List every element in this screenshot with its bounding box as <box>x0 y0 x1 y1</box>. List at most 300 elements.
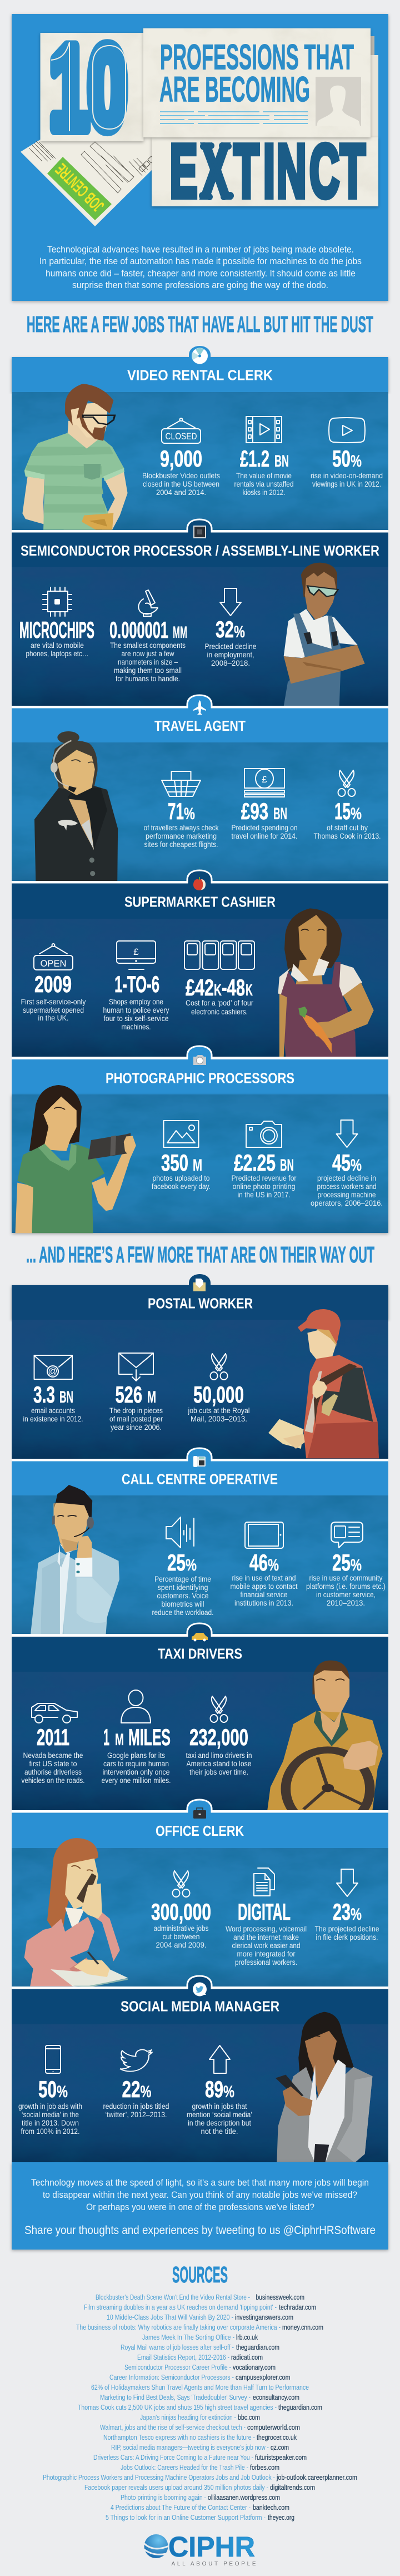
icon: smartphone <box>46 2045 61 2073</box>
description: authorise driverless <box>24 1768 82 1776</box>
description: institutions in 2013. <box>234 1599 293 1607</box>
number: 23 <box>333 1899 351 1925</box>
description: spent identifying <box>158 1583 208 1592</box>
panel: video rental clerk <box>12 346 388 530</box>
stat: 32% <box>204 588 257 667</box>
number: MILES <box>128 1724 171 1750</box>
figure: assembly worker <box>284 563 365 706</box>
description: for humans to handle. <box>116 675 180 683</box>
description: administrative jobs <box>153 1924 209 1933</box>
divider arch <box>12 1623 388 1637</box>
stat: 2011 <box>21 1703 84 1785</box>
closing paragraph: Or perhaps you were in one of the professions we've listed? <box>86 2202 314 2212</box>
icon: film reel badge <box>192 348 208 364</box>
icon: four pods <box>184 941 254 969</box>
description: job cuts at the Royal <box>188 1406 250 1415</box>
divider arch <box>12 1976 388 1989</box>
description: mention ‘social media’ <box>187 2111 252 2119</box>
big number 10: 10 <box>49 22 127 154</box>
number: 2009 <box>34 971 72 997</box>
heading: PHOTOGRAPHIC PROCESSORS <box>106 1071 294 1087</box>
description: and the internet make <box>233 1933 299 1941</box>
heading: TRAVEL AGENT <box>154 719 246 734</box>
panel: hero header <box>12 14 388 301</box>
description: performance marketing <box>146 832 217 840</box>
description: 2010–2013. <box>327 1599 365 1607</box>
closing paragraph: to disappear within the next year. Can you think of any notable jobs we've missed? <box>43 2189 357 2200</box>
icon: scissors <box>210 1696 228 1722</box>
icon: car <box>32 1703 77 1723</box>
icon: mail drop <box>119 1353 153 1381</box>
sources list: forbes.com <box>250 2463 279 2471</box>
intro text: Technological advances have resulted in a number of jobs being made obsolete. <box>47 244 354 255</box>
description: rise in use of text and <box>232 1574 296 1582</box>
number: 1-TO-6 <box>114 971 159 997</box>
stat: 3.3 BN <box>23 1355 83 1423</box>
description: America stand to lose <box>187 1760 251 1768</box>
number: M <box>115 1731 124 1749</box>
sources list: lrb.co.uk <box>236 2333 258 2341</box>
description: customers. Voice <box>157 1592 209 1600</box>
description: processing machine <box>318 1191 376 1199</box>
number: -48 <box>222 974 245 1000</box>
number: £2.25 <box>234 1150 276 1176</box>
number: MM <box>173 623 187 642</box>
heading: SUPERMARKET CASHIER <box>124 894 276 910</box>
description <box>186 1751 252 1776</box>
description: of mail posted per <box>109 1415 163 1423</box>
description: Cost for a ‘pod’ of four <box>186 999 253 1007</box>
figure: postal worker <box>268 1309 379 1458</box>
sources list: bbc.com <box>238 2413 260 2421</box>
main title paper <box>143 28 371 137</box>
icon: email at: @ <box>48 1366 58 1376</box>
number: % <box>351 1556 362 1574</box>
number: BN <box>274 452 289 470</box>
closing paragraph: Technology moves at the speed of light, so it's a sure bet that many more jobs will begin <box>31 2177 369 2188</box>
figure: cashier <box>278 908 374 1057</box>
description: ‘social media’ in the <box>22 2111 79 2119</box>
description: Predicted decline <box>204 642 257 651</box>
sources list: theguardian.com <box>278 2403 322 2411</box>
sources list: Royal Mail warns of job losses after sell-off - <box>121 2343 234 2351</box>
description: four to six self-service <box>103 1014 169 1023</box>
sources list: Facebook paper reveals users upload around 350 million photos daily - <box>84 2483 268 2491</box>
icon: briefcase badge <box>193 1808 206 1819</box>
description: Predicted spending on <box>231 824 298 832</box>
icon: basket <box>162 771 201 796</box>
number: BN <box>273 805 287 823</box>
icon: play screen <box>329 418 365 443</box>
heading: CALL CENTRE OPERATIVE <box>122 1472 278 1487</box>
description: reduce the workload. <box>152 1608 213 1617</box>
stat: 71% <box>143 771 219 849</box>
description: not the title. <box>201 2127 238 2136</box>
number: MICROCHIPS <box>19 617 94 643</box>
description: process workers and <box>317 1182 377 1191</box>
panel: call centre operative <box>12 1448 388 1634</box>
description <box>311 1174 383 1207</box>
number: % <box>268 1556 279 1574</box>
divider arch <box>12 1046 388 1059</box>
number: % <box>184 805 195 823</box>
description: email accounts <box>31 1406 75 1415</box>
figure: social media manager <box>276 2012 372 2163</box>
number: 526 <box>116 1381 142 1408</box>
description <box>21 1751 84 1785</box>
panel: semiconductor processor <box>12 519 388 706</box>
description: facebook every day. <box>152 1182 211 1191</box>
description: from 100% in 2012. <box>21 2127 80 2136</box>
description <box>231 1174 297 1199</box>
description: platforms (i.e. forums etc.) <box>306 1582 386 1591</box>
description <box>143 824 219 849</box>
description: online photo printing <box>232 1182 296 1191</box>
description <box>21 998 86 1022</box>
icon: scissors <box>172 1871 190 1897</box>
divider arch <box>12 1448 388 1462</box>
sources list: futuristspeaker.com <box>255 2453 307 2461</box>
number: % <box>223 2083 234 2101</box>
icon: bone ends on X <box>199 142 234 200</box>
icon: monitor <box>117 941 156 969</box>
number: 3.3 <box>33 1381 55 1408</box>
description: rise in use of community <box>309 1574 383 1582</box>
sources list: Blockbuster's Death Scene Won't End the Video Rental Store - <box>96 2293 250 2301</box>
number: % <box>234 623 245 641</box>
icon: closed sign: CLOSED <box>166 431 197 442</box>
icon: striped globe <box>143 2534 169 2558</box>
panel: taxi drivers <box>12 1623 388 1828</box>
description: supermarket opened <box>23 1006 84 1014</box>
description <box>231 824 298 840</box>
divider arch <box>12 519 388 533</box>
sources list: Jobs Outlook: Careers Headed for the Trash Pile - <box>121 2463 248 2471</box>
icon: phone badge <box>193 1456 206 1467</box>
sources list: econsultancy.com <box>253 2393 299 2401</box>
stat: 25% time <box>152 1517 213 1617</box>
description <box>18 2102 82 2136</box>
description <box>230 1574 298 1607</box>
description: operators, 2006–2016. <box>311 1199 383 1207</box>
description: phones, laptops etc… <box>26 650 89 658</box>
paper: number 10 <box>40 22 143 154</box>
panel: office clerk <box>12 1800 388 1987</box>
job centre paper: JOB CENTRE <box>52 160 108 216</box>
description: First self-service-only <box>21 998 86 1006</box>
icon: down arrow <box>337 1120 358 1147</box>
back sheets <box>153 36 378 144</box>
sources list: ollilaasanen.wordpress.com <box>208 2493 280 2501</box>
description: machines. <box>121 1023 151 1031</box>
number: 232,000 <box>189 1724 248 1750</box>
icon: twitter bird <box>120 2050 152 2071</box>
icon: picture <box>163 1121 199 1147</box>
description: making them too small <box>114 666 182 675</box>
number: 71 <box>168 798 184 824</box>
sources list: Marketing to Find Best Deals, Says 'Tradedoubler' Survey - <box>100 2393 251 2401</box>
description: photos uploaded to <box>152 1174 210 1182</box>
number: 50,000 <box>193 1381 244 1408</box>
description <box>186 999 253 1016</box>
number: 89 <box>205 2076 223 2102</box>
description: reduction in jobs titled <box>103 2102 169 2111</box>
number: M <box>193 1156 202 1175</box>
description: cut between <box>162 1933 200 1941</box>
description: in existence in 2012. <box>23 1415 83 1423</box>
description: Shops employ one <box>109 998 163 1006</box>
number: £42 <box>186 974 214 1000</box>
icon: tablet <box>245 1522 283 1548</box>
description: are now just a few <box>121 650 174 658</box>
number: 350 <box>161 1150 188 1176</box>
icon: person <box>121 1690 151 1723</box>
description <box>187 2102 252 2136</box>
description: The smallest components <box>110 641 186 650</box>
icon: camera <box>246 1121 282 1147</box>
heading: TAXI DRIVERS <box>158 1646 242 1662</box>
description <box>152 1575 213 1617</box>
stat: 50% <box>311 418 383 488</box>
description: are vital to mobile <box>31 641 84 650</box>
number: K <box>214 981 222 999</box>
sources list: job-outlook.careerplanner.com <box>276 2473 357 2481</box>
number: % <box>186 1556 197 1574</box>
description: closed in the US between <box>143 480 219 488</box>
sources list: Driverless Cars: A Driving Force Coming to a Future near You - <box>93 2453 253 2461</box>
stat: 1.2 BN <box>234 417 293 497</box>
description: cars to require human <box>103 1760 169 1768</box>
sources list <box>43 2293 357 2521</box>
panel: closing call to action <box>12 2162 388 2250</box>
description: in file clerk positions. <box>316 1933 378 1941</box>
figure: travel agent <box>34 731 118 881</box>
icon: money stack: £ <box>262 774 267 785</box>
closing paragraph <box>31 2177 369 2212</box>
description: in employment, <box>207 651 254 659</box>
extinct paper <box>152 130 378 214</box>
description <box>103 998 169 1031</box>
description: financial service <box>240 1591 288 1599</box>
description <box>110 641 186 683</box>
description <box>313 824 381 840</box>
job centre paper <box>21 133 154 226</box>
number: £93 <box>241 798 268 824</box>
number: K <box>246 981 253 999</box>
divider arch <box>12 1800 388 1813</box>
figure: photographer <box>16 1085 136 1233</box>
description <box>23 1406 83 1423</box>
number: % <box>351 805 362 823</box>
stat: 93 BN <box>231 769 298 840</box>
description <box>26 641 89 658</box>
icon: documents <box>254 1868 274 1896</box>
description: of travellers always check <box>143 824 219 832</box>
sources list: 62% of Holidaymakers Shun Travel Agents and More than Half Turn to Performance <box>91 2383 309 2391</box>
description: 2008–2018. <box>211 659 250 667</box>
number: £1.2 <box>240 445 269 472</box>
number: 50 <box>332 445 351 472</box>
stat: 15% <box>313 770 381 840</box>
sources list: theyec.org <box>268 2513 294 2521</box>
stat: 350 M <box>152 1121 211 1191</box>
description: first US state to <box>29 1760 77 1768</box>
icon: taxi badge <box>192 1633 208 1642</box>
sources list: Film streaming doubles in a year as UK reaches on demand 'tipping point' - <box>84 2303 277 2311</box>
description: electronic cashiers. <box>191 1008 248 1016</box>
description <box>226 1925 307 1966</box>
number: 25 <box>332 1549 351 1576</box>
divider arch <box>12 870 388 884</box>
description: Mail, 2003–2013. <box>191 1415 247 1423</box>
description: rise in video-on-demand <box>311 472 383 480</box>
description <box>234 472 293 497</box>
stat: 232,000 <box>186 1696 252 1776</box>
description: sites for cheapest flights. <box>144 840 218 849</box>
description: year since 2006. <box>111 1423 162 1431</box>
photo silhouette <box>316 77 361 126</box>
sources list: Photo printing is booming again - <box>121 2493 206 2501</box>
description: professional workers. <box>235 1958 297 1966</box>
description: vehicles on the roads. <box>21 1776 84 1785</box>
number: 0.000001 <box>109 617 168 643</box>
sources list: vocationary.com <box>233 2363 276 2371</box>
logo: ciphr <box>143 2531 256 2567</box>
stat: 46% <box>230 1522 298 1607</box>
number: 45 <box>332 1150 351 1176</box>
sources list: Career Information: Semiconductor Processors - <box>109 2373 234 2381</box>
description: Google plans for its <box>107 1751 165 1760</box>
number: BN <box>59 1388 73 1406</box>
heading: VIDEO RENTAL CLERK <box>127 368 273 384</box>
panel: supermarket cashier <box>12 870 388 1057</box>
sources list: radicati.com <box>231 2353 263 2361</box>
description: biometrics will <box>161 1600 204 1608</box>
number: DIGITAL <box>238 1899 291 1925</box>
panel: postal worker <box>12 1274 388 1459</box>
sources list: 5 Things to look for in an Online Customer Support Platform - <box>106 2513 266 2521</box>
icon: down arrow <box>220 588 241 616</box>
description: human to police every <box>103 1006 169 1014</box>
sources list: computerworld.com <box>247 2423 300 2431</box>
number: % <box>140 2083 151 2101</box>
description: projected decline in <box>317 1174 376 1182</box>
number: 46 <box>249 1549 268 1576</box>
stat: 50% job ads <box>18 2045 82 2136</box>
description: Nevada became the <box>23 1751 83 1760</box>
description: Blockbuster Video outlets <box>142 472 220 480</box>
icon: camera badge <box>193 1055 206 1065</box>
sources list: campusexplorer.com <box>236 2373 290 2381</box>
panel: social media manager <box>12 1976 388 2163</box>
number: % <box>351 1905 362 1924</box>
number: 32 <box>216 616 234 642</box>
figure: call operative <box>31 1485 119 1634</box>
stat: 45% <box>311 1120 383 1207</box>
number: 2011 <box>37 1724 69 1750</box>
description <box>314 1925 379 1941</box>
sources list: RIP, social media managers—tweeting is everyone's job now - <box>111 2443 269 2451</box>
description: more integrated for <box>237 1950 296 1958</box>
stat: 300,000 <box>151 1871 211 1949</box>
icon: open sign <box>34 944 73 970</box>
sources list: investinganswers.com <box>235 2313 293 2321</box>
stat: microchips <box>19 587 94 658</box>
figure: office clerk <box>24 1838 128 1987</box>
icon: twitter bubble badge <box>193 1982 207 1997</box>
stat: 42k-48k <box>184 941 254 1016</box>
number: 300,000 <box>151 1899 211 1925</box>
sources list: Walmart, jobs and the rise of self-service checkout tech - <box>100 2423 246 2431</box>
description <box>152 1174 211 1191</box>
stat: 1-to-6 <box>103 941 169 1031</box>
description: in customer service, <box>316 1591 376 1599</box>
stat: 22% <box>103 2050 169 2119</box>
description: taxi and limo drivers in <box>186 1751 252 1760</box>
stat: 89% <box>187 2045 252 2136</box>
number: 9,000 <box>160 445 202 472</box>
figure: video clerk <box>22 384 128 530</box>
sources list: Semiconductor Processor Career Profile - <box>124 2363 231 2371</box>
sources list: James Meek In The Sorting Office - <box>142 2333 234 2341</box>
icon: monitor: £ <box>133 947 139 957</box>
icon: open sign: OPEN <box>40 958 67 969</box>
description: intervention only once <box>102 1768 170 1776</box>
icon: down arrow <box>337 1869 358 1896</box>
description <box>103 2102 169 2119</box>
icon: closed sign <box>162 418 201 443</box>
heading: SOCIAL MEDIA MANAGER <box>121 1999 279 2014</box>
sources list: techradar.com <box>279 2303 316 2311</box>
icon: speech card <box>331 1522 363 1548</box>
description: their jobs over time. <box>189 1768 248 1776</box>
tagline: ALL ABOUT PEOPLE <box>171 2561 256 2567</box>
text: SOURCES <box>172 2262 228 2287</box>
description: of staff cut by <box>327 824 368 832</box>
number: 50 <box>38 2076 57 2102</box>
number: 22 <box>122 2076 140 2102</box>
stat: 50,000 <box>188 1354 250 1423</box>
divider arch <box>12 695 388 709</box>
number: BN <box>280 1156 294 1175</box>
panel: photographic processors <box>12 1046 388 1233</box>
wordmark: CIPHR <box>168 2531 255 2563</box>
stat: 2009 <box>21 944 86 1022</box>
number: M <box>147 1388 156 1406</box>
description <box>204 642 257 667</box>
description: nanometers in size – <box>118 658 178 666</box>
sources list: money.cnn.com <box>282 2323 323 2331</box>
sources list: Email Statistics Report, 2012-2016 - <box>137 2353 229 2361</box>
description: in the US in 2017. <box>238 1191 290 1199</box>
number: 25 <box>167 1549 186 1576</box>
icon: chip <box>43 587 72 616</box>
description: viewings in UK in 2012. <box>312 480 381 488</box>
description <box>101 1751 171 1785</box>
description <box>142 472 220 497</box>
stat: 2.25 BN <box>231 1121 297 1199</box>
description: Percentage of time <box>154 1575 211 1583</box>
icon: speaker <box>166 1517 194 1548</box>
description: growth in job ads with <box>18 2102 82 2111</box>
sources list: digitaltrends.com <box>270 2483 315 2491</box>
number: % <box>351 1156 362 1175</box>
sources list: Japan's ninjas heading for extinction - <box>140 2413 236 2421</box>
description: rentals via unstaffed <box>234 480 293 488</box>
sources list: thegrocer.co.uk <box>257 2433 297 2441</box>
description: mobile apps to contact <box>230 1582 298 1591</box>
sources list: banktech.com <box>253 2503 289 2511</box>
